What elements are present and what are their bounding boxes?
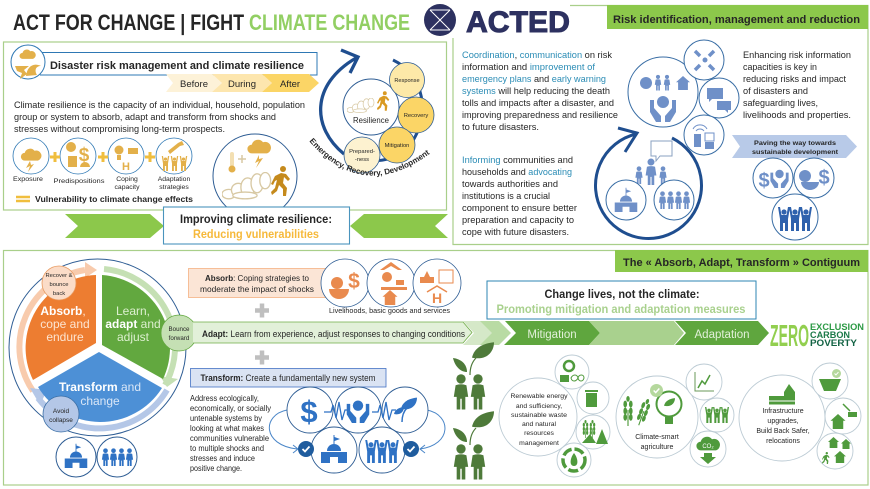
callout: improving climate resilience bbox=[65, 207, 448, 244]
text: address: communities vulnerable bbox=[190, 434, 269, 443]
text: address: looking at what makes bbox=[190, 424, 264, 433]
main circle text: and sufficiency, bbox=[516, 403, 562, 410]
callout: change lives bbox=[487, 281, 756, 319]
wheel outline bbox=[9, 259, 186, 436]
icon: predispositions: $ bbox=[79, 145, 90, 166]
text: enhancing bbox=[743, 50, 851, 121]
icon: services: H bbox=[432, 290, 442, 306]
panel heading: Risk identification, management and reduction bbox=[613, 14, 860, 26]
icon: chart bbox=[686, 364, 722, 400]
icon: early warning device bbox=[684, 115, 724, 155]
title: ACT FOR CHANGE | FIGHT CLIMATE CHANGE bbox=[13, 10, 410, 35]
main circle: Build Back Safer, bbox=[756, 428, 810, 435]
main circle: Climate-smart bbox=[635, 434, 679, 441]
factor labels: Predispositions bbox=[54, 178, 105, 185]
icon: food and savings: $ bbox=[818, 167, 830, 189]
big circular arrow bbox=[321, 50, 358, 154]
callout box bbox=[164, 207, 350, 244]
text: coordination: emergency plans and early warning bbox=[462, 74, 606, 85]
icon: economy and protection: $ bbox=[758, 170, 770, 192]
icon: savings and food: $ bbox=[348, 270, 360, 293]
icon: people bbox=[97, 437, 137, 477]
feedback arrows bbox=[269, 410, 445, 453]
main circle: upgrades, bbox=[767, 418, 799, 425]
panel border bbox=[4, 250, 868, 485]
badge: recover: bounce bbox=[49, 282, 69, 288]
icon: institution bbox=[606, 180, 646, 220]
factor labels bbox=[13, 176, 190, 191]
icon: coping capacity: H bbox=[122, 161, 130, 173]
arrow band: adapt bbox=[104, 269, 178, 387]
text: informing: institutions is a crucial bbox=[462, 191, 550, 202]
icon: social bbox=[335, 387, 381, 433]
text: informing: preparation and capacity to bbox=[462, 215, 574, 226]
arrow band: absorb bbox=[19, 262, 97, 391]
badge: recover: Recover & bbox=[45, 273, 73, 279]
text: enhancing: livelihoods and properties. bbox=[743, 110, 851, 121]
icon: natural resources bbox=[576, 415, 610, 449]
icon: adaptation strategies bbox=[156, 138, 192, 174]
text: address: to multiple shocks and bbox=[190, 444, 264, 453]
banner: paving the way: Paving the way towards bbox=[754, 140, 836, 147]
icon: check right bbox=[403, 441, 419, 457]
icon: services bbox=[413, 259, 461, 307]
recovery circle: Recovery bbox=[404, 113, 428, 119]
factor labels: strategies bbox=[159, 184, 189, 191]
sector: adapt: adjust bbox=[117, 330, 150, 344]
icon: rebuild bbox=[825, 398, 861, 434]
icon: economic: $ bbox=[300, 394, 318, 429]
icon: disaster bbox=[11, 45, 45, 79]
cluster: mitigation measures bbox=[499, 355, 610, 477]
text: enhancing: of disasters and bbox=[743, 86, 808, 97]
text: coordination: systems will help reducing the death bbox=[462, 86, 610, 97]
circular arrow bbox=[595, 128, 701, 239]
text: informing: households and advocating bbox=[462, 167, 572, 178]
timeline chevrons: During bbox=[228, 79, 256, 90]
adapt bar: Adapt: Learn from experience, adjust responses to changing conditions bbox=[202, 329, 466, 339]
vulnerability factors bbox=[13, 138, 192, 191]
chevron band: mitigation and adaptation bbox=[463, 321, 769, 345]
text: informing: component to ensure better bbox=[462, 203, 577, 214]
callout: change lives: Change lives, not the climate: bbox=[544, 289, 700, 301]
panel heading bbox=[615, 250, 868, 272]
caption: livelihoods: Livelihoods, basic goods and services bbox=[329, 306, 450, 315]
main circle text: and natural bbox=[522, 421, 556, 428]
sector: absorb: Absorb, bbox=[40, 304, 86, 318]
absorb box: Absorb: Coping strategies to bbox=[205, 274, 309, 283]
definition text: stresses without compromising long-term prospects. bbox=[14, 124, 225, 135]
preparedness circle bbox=[344, 137, 380, 173]
heading box bbox=[40, 52, 317, 75]
mitigation circle: Mitigation bbox=[385, 143, 409, 149]
panel: risk identification, management and reduction bbox=[453, 5, 868, 244]
sector: absorb bbox=[26, 275, 96, 380]
text: address bbox=[190, 394, 271, 473]
panel heading: The « Absorb, Adapt, Transform » Contiguum bbox=[623, 257, 860, 269]
icon: food and savings bbox=[794, 158, 834, 198]
main circle text: management bbox=[519, 440, 559, 447]
icon: people bbox=[654, 180, 694, 220]
icon: economic bbox=[287, 387, 333, 433]
icon: check left bbox=[298, 441, 314, 457]
icon: people with raised arms bbox=[772, 194, 818, 240]
text: coordination bbox=[462, 50, 618, 133]
text: enhancing: reducing risks and impact bbox=[743, 74, 846, 85]
icon: shelter and goods bbox=[367, 259, 415, 307]
legend: vulnerability: Vulnerability to climate change effects bbox=[35, 194, 193, 204]
icon: couple with leaves, bottom bbox=[453, 411, 494, 480]
text: coordination: information and improvement of bbox=[462, 62, 595, 73]
icon: renewable cycle bbox=[557, 443, 591, 477]
sector: adapt bbox=[102, 275, 170, 379]
icon: temperature, storm and resilient runner bbox=[213, 134, 297, 218]
panel border bbox=[453, 6, 868, 244]
adapt bar bbox=[193, 322, 472, 343]
icon: co2: CO₂ bbox=[702, 444, 714, 450]
panel border bbox=[4, 42, 446, 210]
factor labels: Coping bbox=[116, 176, 138, 183]
icon: economy and protection bbox=[753, 158, 793, 198]
text: coordination: to future disasters. bbox=[462, 122, 539, 133]
timeline chevrons: Before bbox=[180, 79, 208, 90]
icon: ecological bbox=[382, 387, 428, 433]
sector: transform bbox=[38, 352, 162, 422]
text: informing: Informing communities and bbox=[462, 155, 573, 166]
text: address: economically, or socially bbox=[190, 404, 271, 413]
plus: absorb and adapt bbox=[255, 304, 269, 318]
factor labels: capacity bbox=[115, 184, 140, 191]
left green arrow bbox=[65, 214, 164, 238]
main circle bbox=[739, 375, 825, 461]
callout: change lives: Promoting mitigation and adaptation measures bbox=[496, 304, 746, 316]
sector: absorb: cope and bbox=[40, 317, 90, 331]
icon: community speech bbox=[635, 141, 672, 185]
definition text bbox=[14, 100, 305, 135]
banner: paving the way: sustainable development bbox=[752, 149, 839, 156]
right green arrow bbox=[350, 214, 448, 238]
main circle bbox=[616, 376, 698, 458]
resilience wheel bbox=[9, 259, 197, 436]
text: enhancing: safeguarding lives, bbox=[743, 98, 818, 109]
transform systems diagram bbox=[269, 387, 445, 473]
icon: predispositions bbox=[60, 138, 96, 174]
logo: zero exclusion carbon poverty: EXCLUSION bbox=[810, 322, 864, 332]
icon: institution bbox=[311, 427, 357, 473]
badge: recover bbox=[42, 266, 76, 300]
transform box: Transform: Create a fundamentally new system bbox=[200, 373, 376, 383]
text: address: positive change. bbox=[190, 464, 242, 473]
icon: exposure bbox=[13, 138, 49, 174]
icon: waste bin bbox=[577, 382, 609, 414]
absorb box: moderate the impact of shocks bbox=[200, 285, 314, 294]
icon: people bbox=[700, 398, 734, 432]
icon: chat bubbles bbox=[699, 78, 739, 118]
main circle text: Renewable energy bbox=[510, 393, 568, 400]
main circle: Infrastructure bbox=[762, 408, 804, 415]
icon: institution bbox=[56, 437, 96, 477]
text: coordination: improving preparedness and resilience bbox=[462, 110, 618, 121]
timeline chevrons: After bbox=[280, 79, 300, 90]
panel: absorb, adapt, transform contiguum bbox=[4, 250, 868, 485]
text: informing: cope with future disasters. bbox=[462, 227, 569, 238]
logo: ACTED bbox=[424, 4, 570, 39]
chevron band: mitigation and adaptation: Mitigation bbox=[527, 329, 577, 341]
text: address: untenable systems by bbox=[190, 414, 262, 423]
main circle text: resources bbox=[524, 430, 555, 437]
resilience cycle bbox=[310, 48, 434, 178]
logo: ACTED: ACTED bbox=[466, 6, 570, 39]
sector: transform: change bbox=[80, 394, 120, 408]
badge: avoid collapse: collapse bbox=[49, 417, 73, 424]
sector: adapt: Learn, bbox=[116, 304, 150, 318]
response circle: Response bbox=[394, 78, 420, 84]
definition text: Climate resilience is the capacity of an individual, household, population bbox=[14, 100, 305, 111]
factor labels: Adaptation bbox=[158, 176, 190, 183]
panel heading bbox=[607, 5, 868, 29]
ring behind circles bbox=[350, 60, 422, 161]
transform box bbox=[190, 368, 386, 387]
cluster: climate-smart agriculture bbox=[616, 364, 734, 467]
badge: avoid collapse: Avoid bbox=[53, 408, 69, 415]
badge: bounce forward: Bounce bbox=[168, 326, 190, 333]
panel: disaster risk management and climate resilience bbox=[2, 41, 448, 211]
icon: savings and food bbox=[321, 259, 369, 307]
main circle: agriculture bbox=[641, 444, 673, 451]
text: coordination: tolls and impacts after a disaster, and bbox=[462, 98, 614, 109]
banner: paving the way bbox=[732, 135, 857, 158]
icon: coping capacity bbox=[108, 138, 144, 174]
icon: recycling and energy bbox=[555, 355, 589, 389]
chevron band: mitigation and adaptation: Adaptation bbox=[694, 329, 750, 341]
main circle: relocations bbox=[766, 438, 800, 445]
cluster: infrastructure and safer building bbox=[739, 363, 861, 469]
icon: relocation bbox=[817, 433, 853, 469]
main circle text: sustainable waste bbox=[511, 412, 567, 419]
text: informing: towards authorities and bbox=[462, 179, 558, 190]
resilience circle: Resilience bbox=[353, 116, 389, 125]
badge: avoid collapse bbox=[43, 396, 79, 432]
badge: recover: back bbox=[53, 291, 65, 297]
icon: people bbox=[359, 427, 405, 473]
plus signs bbox=[50, 152, 155, 162]
icon: coordination arrows bbox=[684, 40, 724, 80]
arrow band: transform bbox=[30, 388, 167, 428]
plus: adapt and transform bbox=[255, 350, 269, 364]
main circle text bbox=[499, 378, 577, 456]
sector: absorb: endure bbox=[46, 330, 84, 344]
timeline chevrons bbox=[166, 74, 319, 92]
sector: transform: Transform and bbox=[59, 380, 141, 394]
definition text: group or system to absorb, adapt and transform from shocks and bbox=[14, 112, 276, 123]
factor labels: Exposure bbox=[13, 176, 43, 183]
preparedness circle: Prepared- bbox=[349, 149, 375, 155]
logo: zero exclusion carbon poverty: CARBON bbox=[810, 330, 850, 340]
callout: improving climate resilience: Improving climate resilience: bbox=[180, 214, 332, 226]
badge: bounce forward bbox=[161, 315, 197, 351]
curved label: Emergency, Recovery, Development bbox=[310, 138, 430, 178]
text: address: stresses and induce bbox=[190, 454, 255, 463]
text: address: Address ecologically, bbox=[190, 394, 259, 403]
sector: adapt: adapt and bbox=[105, 317, 161, 331]
logo: zero exclusion carbon poverty: POVERTY bbox=[810, 338, 857, 348]
text: enhancing: capacities is key in bbox=[743, 62, 817, 73]
text: coordination: Coordination, communication on risk bbox=[462, 50, 612, 61]
pulse lines bbox=[324, 402, 396, 420]
text: enhancing: Enhancing risk information bbox=[743, 50, 851, 61]
preparedness circle: -ness bbox=[355, 157, 369, 163]
icon: safe road bbox=[812, 363, 848, 399]
icon: couple with leaves, top bbox=[453, 342, 494, 410]
icon: protected community bbox=[628, 57, 698, 127]
callout: improving climate resilience: Reducing vulnerabilities bbox=[193, 229, 319, 241]
text: informing bbox=[462, 155, 577, 238]
badge: bounce forward: forward bbox=[169, 335, 190, 342]
heading box: Disaster risk management and climate resilience bbox=[50, 60, 304, 72]
logo: zero exclusion carbon poverty: ZERO bbox=[770, 318, 809, 353]
absorb box bbox=[188, 268, 326, 298]
